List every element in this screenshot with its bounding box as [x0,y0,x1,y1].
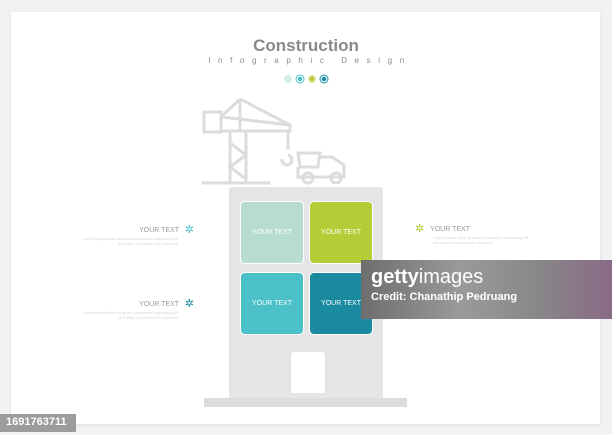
window 2: YOUR TEXT [321,229,361,236]
window 3 [240,272,304,335]
door [291,352,325,393]
watermark banner: gettyimages [371,266,483,288]
subtitle: Infographic Design [208,56,412,65]
id label: 1691763711 [6,416,67,428]
text block left 2 [83,298,194,320]
text block left 2: YOUR TEXT ✲ [139,298,194,310]
building [229,187,383,399]
text block left 1: Lorem ipsum dolor sit amet consectetur adipiscing elit [83,236,178,241]
building base [204,398,407,407]
text block right: sed diam nonummy nibh euismod [433,240,493,245]
watermark banner [361,260,612,319]
title: Construction [253,36,359,55]
window 3: YOUR TEXT [252,300,292,307]
text block right [415,223,528,245]
id label [0,414,76,432]
text block left 1: YOUR TEXT ✲ [139,224,194,236]
text block right: Lorem ipsum dolor sit amet consectetur adipiscing elit [433,235,528,240]
window 1: YOUR TEXT [252,229,292,236]
window 4: YOUR TEXT [321,300,361,307]
text block left 2: Lorem ipsum dolor sit amet consectetur adipiscing elit [83,310,178,315]
dots [284,74,328,84]
window 1 [240,201,304,264]
icon: crane and truck [202,98,346,184]
text block left 1: sed diam nonummy nibh euismod [118,241,178,246]
text block left 2: sed diam nonummy nibh euismod [118,315,178,320]
text block right: ✲ YOUR TEXT [415,223,470,235]
window 2 [309,201,373,264]
window 4 [309,272,373,335]
text block left 1 [83,224,194,246]
watermark banner: Credit: Chanathip Pedruang [371,291,517,303]
